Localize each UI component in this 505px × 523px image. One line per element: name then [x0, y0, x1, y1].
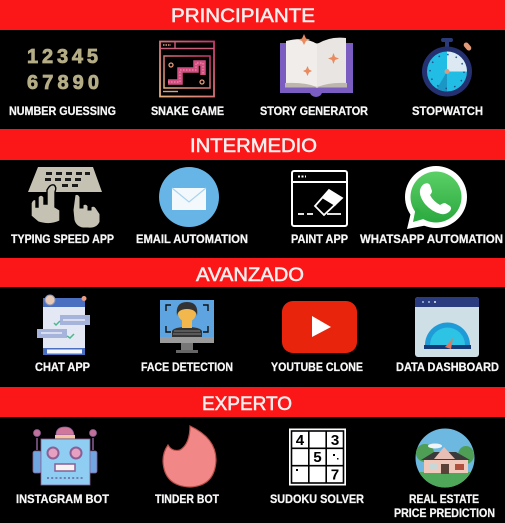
label: instagram bot: INSTAGRAM BOT — [16, 494, 109, 506]
icon: number guessing digits: 12345 — [27, 46, 98, 68]
icon: youtube logo — [282, 301, 357, 353]
icon: sudoku grid: 5 — [313, 450, 322, 467]
label: sudoku solver: SUDOKU SOLVER — [270, 494, 365, 506]
banner: principiante — [0, 0, 505, 30]
icon: sudoku grid: 3 — [330, 433, 340, 450]
label: real estate price prediction: REAL ESTATE — [409, 494, 479, 506]
icon: typing hands keyboard — [28, 167, 102, 228]
icon: sudoku grid — [289, 428, 346, 486]
icon: data dashboard gauge — [415, 297, 479, 357]
icon: sudoku grid: 7 — [330, 468, 340, 484]
icon: paint app eraser window — [292, 171, 347, 226]
banner: experto: EXPERTO — [202, 394, 292, 415]
label: real estate price prediction — [394, 494, 495, 520]
banner: avanzado — [0, 258, 505, 287]
icon: whatsapp logo — [405, 166, 467, 229]
banner: intermedio: INTERMEDIO — [190, 136, 317, 157]
icon: sudoku grid: 4 — [295, 433, 305, 450]
label: whatsapp automation: WHATSAPP AUTOMATION — [360, 234, 503, 246]
icon: number guessing digits: 67890 — [27, 72, 99, 94]
label: number guessing: NUMBER GUESSING — [9, 106, 116, 118]
label: stopwatch: STOPWATCH — [412, 106, 483, 118]
label: story generator: STORY GENERATOR — [260, 106, 369, 118]
label: email automation: EMAIL AUTOMATION — [136, 234, 248, 246]
label: paint app: PAINT APP — [291, 234, 348, 246]
label: typing speed app: TYPING SPEED APP — [11, 234, 114, 246]
label: data dashboard: DATA DASHBOARD — [396, 362, 499, 374]
icon: open book — [280, 34, 353, 97]
banner: avanzado: AVANZADO — [196, 265, 304, 286]
label: tinder bot: TINDER BOT — [155, 494, 219, 506]
label: chat app: CHAT APP — [35, 362, 90, 374]
label: snake game: SNAKE GAME — [151, 106, 224, 118]
icon: chat app — [37, 295, 90, 355]
label: real estate price prediction: PRICE PREDICTION — [394, 508, 495, 520]
label: face detection: FACE DETECTION — [141, 362, 233, 374]
banner: experto — [0, 387, 505, 417]
icon: snake game — [160, 42, 214, 96]
label: youtube clone: YOUTUBE CLONE — [271, 362, 363, 374]
icon: email circle — [159, 167, 219, 227]
icon: tinder flame — [163, 426, 216, 487]
icon: number guessing digits — [27, 46, 99, 94]
icon: face detection monitor — [160, 300, 214, 353]
icon: house in circle — [416, 428, 474, 488]
icon: stopwatch — [422, 38, 472, 96]
banner: principiante: PRINCIPIANTE — [171, 6, 315, 27]
banner: intermedio — [0, 129, 505, 160]
icon: robot — [33, 427, 97, 485]
